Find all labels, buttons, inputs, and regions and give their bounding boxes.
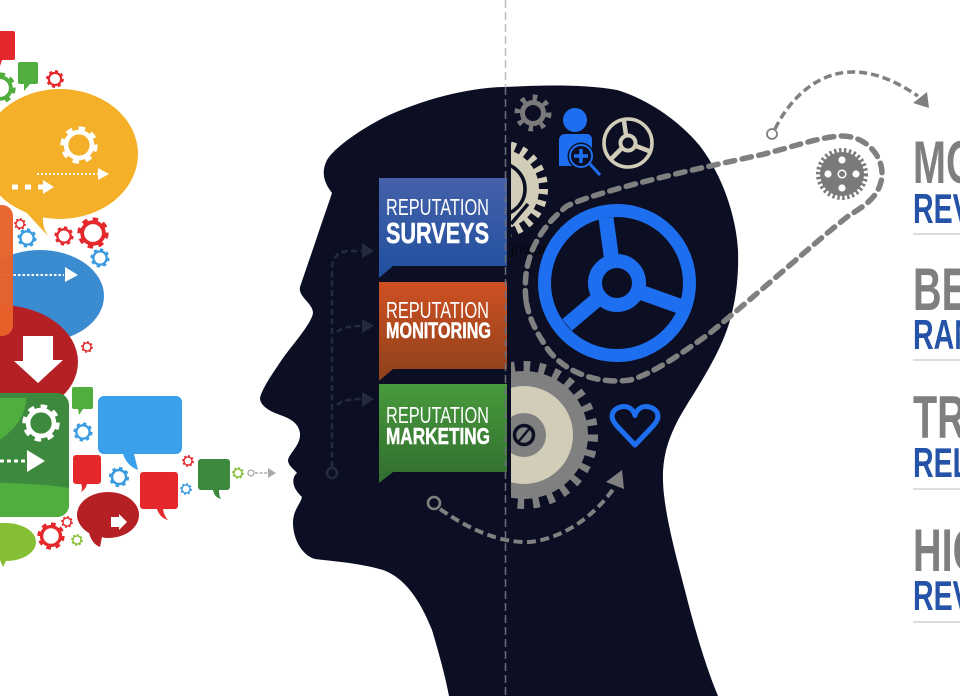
icon: blue gear (74, 423, 92, 441)
bubble: orange (0, 89, 138, 237)
icon: green gear near arrow (233, 468, 243, 478)
arrow: lower curved inside head (428, 470, 624, 542)
icon: cream wheel (604, 119, 652, 167)
divider: vertical dashed centre line (504, 0, 506, 696)
icon: white gear (62, 128, 96, 162)
icon: green gear top (0, 74, 14, 102)
text: reputation marketing: MARKETING (386, 423, 490, 449)
bubble: small green (18, 62, 38, 91)
bubble: red small (73, 455, 101, 492)
text: reputation monitoring: MONITORING (386, 318, 491, 343)
bubble: red top (0, 31, 15, 66)
bubble: red square (140, 472, 178, 520)
icon: cream gear (511, 142, 548, 236)
text: reputation surveys: SURVEYS (386, 218, 489, 250)
text: reputation surveys: REPUTATION (386, 194, 489, 220)
icon: grey gear small (518, 98, 548, 128)
bubble: green small right (72, 387, 93, 415)
banner: reputation marketing (379, 384, 507, 483)
icon: grey large gear (511, 361, 598, 509)
bubble: blue oval (0, 250, 104, 342)
arrow: white on green (0, 450, 45, 472)
bubble: dark red oval (77, 492, 139, 547)
text: reputation monitoring (386, 297, 491, 343)
bubble: light green (0, 523, 36, 567)
icon: blue heart (612, 406, 658, 445)
text: reputation surveys (386, 194, 489, 250)
icon: large blue wheel (544, 210, 690, 356)
panel: green rounded square (0, 393, 69, 517)
bubble: dark red (0, 305, 78, 419)
head silhouette (260, 85, 738, 696)
arrow: top curved to the results (767, 72, 929, 139)
stray caption text: jnition (510, 241, 550, 258)
text: reputation marketing: REPUTATION (386, 402, 489, 428)
icon: blue gear center (110, 468, 128, 486)
icon: white gear on green (24, 406, 58, 440)
panel: speech bubble cluster (0, 31, 276, 567)
result: fourth (913, 517, 960, 623)
icon: small gears row (15, 219, 109, 352)
faint arrows inside head (327, 243, 374, 478)
arrow: curved dashed belt (525, 136, 882, 381)
icon: grey toothed gear (818, 150, 866, 198)
arrow: dotted on blue (0, 267, 78, 282)
icon: gears right (39, 456, 193, 548)
text: reputation marketing (386, 402, 490, 449)
panel: results list (913, 129, 960, 623)
arrow: dotted white (37, 168, 109, 180)
result: third (913, 384, 960, 490)
banner: reputation monitoring (379, 282, 507, 381)
panel: orange rounded block (0, 205, 13, 336)
result: first (913, 129, 960, 235)
text: reputation monitoring: REPUTATION (386, 297, 489, 323)
bubble: large blue (98, 396, 182, 470)
icon: white down arrow (14, 336, 63, 383)
icon: red gear top (47, 71, 63, 87)
icon: white arrow (111, 514, 127, 530)
arrow: into the mouth (248, 468, 276, 478)
banner: reputation surveys (379, 178, 507, 278)
result: second (913, 256, 960, 361)
icon: person with magnifier (559, 108, 600, 175)
bubble: dark green (198, 459, 230, 499)
arrow: dashed white (12, 180, 54, 194)
